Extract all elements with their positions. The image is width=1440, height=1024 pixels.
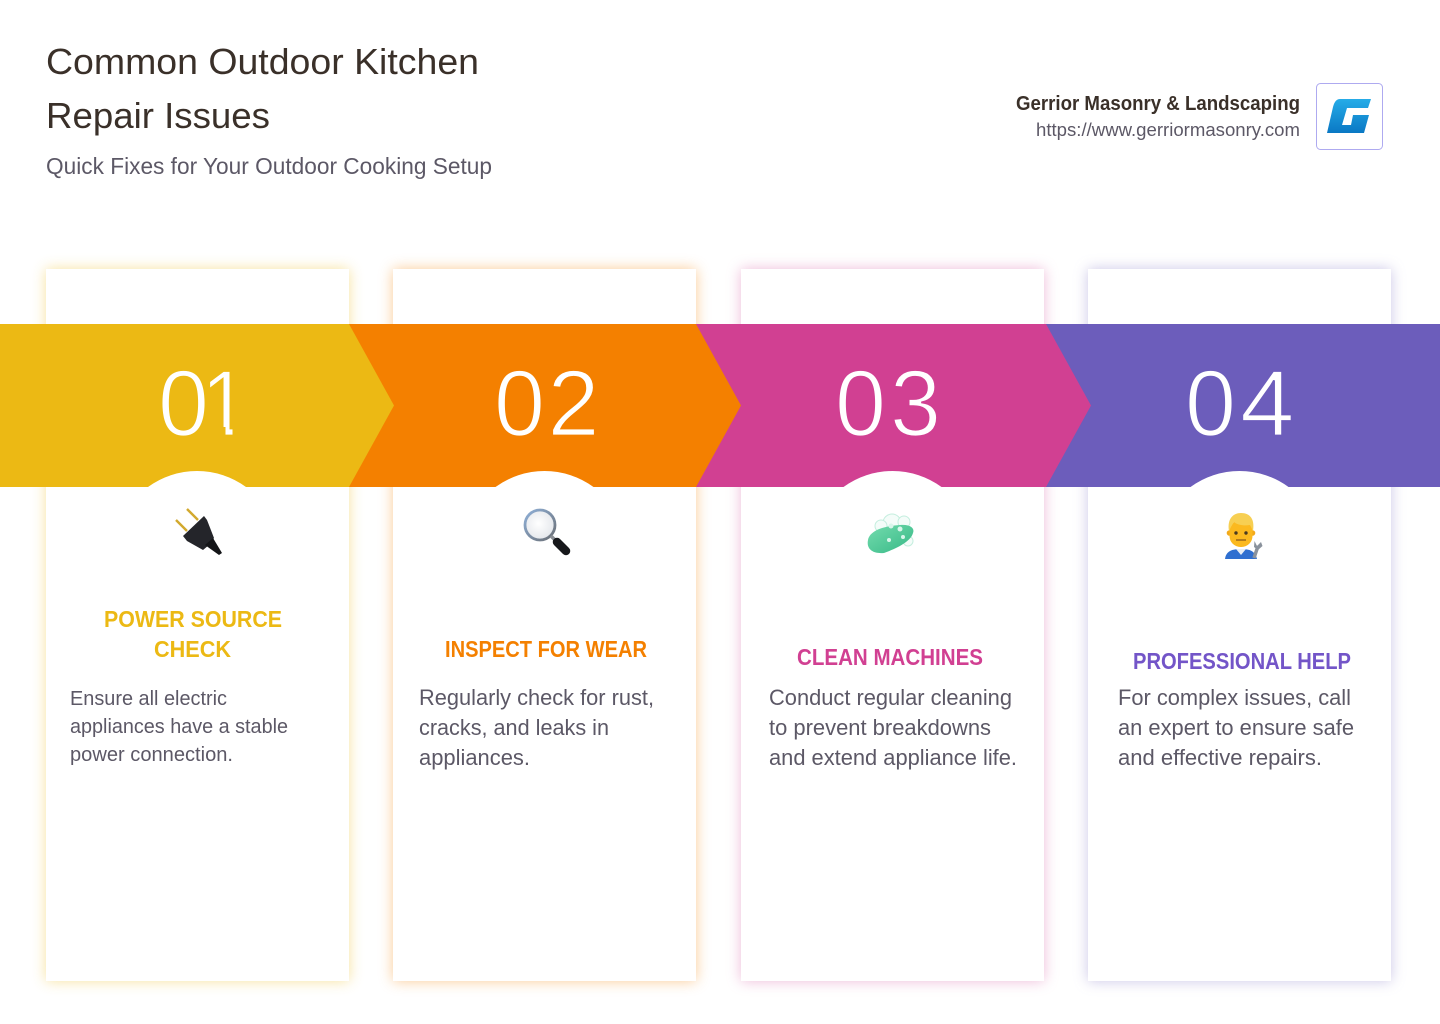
- chevron shape: [1046, 324, 1440, 487]
- icon: company logo: [1316, 84, 1382, 150]
- icon: mechanic: [1225, 513, 1262, 559]
- circle notch: [844, 471, 942, 487]
- heading: [104, 606, 282, 662]
- icon: soap bar: [868, 514, 913, 553]
- number 02: 2: [548, 350, 600, 456]
- body text: appliances.: [419, 745, 530, 770]
- card background: [46, 269, 349, 981]
- number 01: [158, 350, 249, 456]
- subtitle: Quick Fixes for Your Outdoor Cooking Setup: [46, 153, 492, 179]
- body text: power connection.: [70, 744, 233, 766]
- brand block: [1016, 84, 1382, 150]
- card background: [1088, 269, 1391, 981]
- heading: CLEAN MACHINES: [797, 644, 983, 670]
- body text: and extend appliance life.: [769, 745, 1017, 770]
- title: Common Outdoor Kitchen: [46, 41, 479, 82]
- body text: to prevent breakdowns: [769, 715, 991, 740]
- body text: an expert to ensure safe: [1118, 715, 1354, 740]
- body text: For complex issues, call: [1118, 685, 1351, 710]
- number 04: 0: [1185, 350, 1236, 456]
- body text: appliances have a stable: [70, 716, 288, 738]
- chevron shape: [0, 324, 394, 487]
- heading: POWER SOURCE: [104, 606, 282, 632]
- chevron band 01: [0, 324, 394, 487]
- body text: [70, 688, 288, 766]
- heading: CHECK: [154, 636, 231, 662]
- body text: [769, 685, 1017, 770]
- number 04: 4: [1240, 350, 1294, 456]
- number 02: [494, 350, 600, 456]
- card background: [393, 269, 696, 981]
- number 04: [1185, 350, 1294, 456]
- number 01: 0: [158, 350, 209, 456]
- panel: clean machines: [741, 269, 1044, 981]
- heading: INSPECT FOR WEAR: [445, 636, 647, 662]
- title: Repair Issues: [46, 95, 270, 136]
- circle notch: [496, 471, 594, 487]
- panel: professional help: [1088, 269, 1391, 981]
- heading: PROFESSIONAL HELP: [1133, 648, 1351, 674]
- number 01: 1: [201, 350, 249, 456]
- chevron band 02: [349, 324, 741, 487]
- body text: [419, 685, 654, 770]
- icon: electric plug: [176, 509, 222, 555]
- chevron band 04: [1046, 324, 1440, 487]
- brand name: Gerrior Masonry & Landscaping: [1016, 93, 1300, 115]
- title: [46, 41, 479, 136]
- circle notch: [1190, 471, 1288, 487]
- body text: cracks, and leaks in: [419, 715, 609, 740]
- panel: inspect for wear: [393, 269, 696, 981]
- number 03: 0: [835, 350, 886, 456]
- chevron shape: [696, 324, 1091, 487]
- brand url: https://www.gerriormasonry.com: [1036, 120, 1300, 140]
- circle notch: [148, 471, 246, 487]
- panel: power source check: [46, 269, 349, 981]
- icon: magnifying glass: [525, 510, 566, 551]
- body text: [1118, 685, 1354, 770]
- header: title block: [46, 41, 492, 179]
- chevron band 03: [696, 324, 1091, 487]
- body text: and effective repairs.: [1118, 745, 1322, 770]
- chevron shape: [349, 324, 741, 487]
- body text: Regularly check for rust,: [419, 685, 654, 710]
- number 03: 3: [890, 350, 941, 456]
- body text: Conduct regular cleaning: [769, 685, 1012, 710]
- body text: Ensure all electric: [70, 688, 227, 710]
- number 03: [835, 350, 941, 456]
- card background: [741, 269, 1044, 981]
- number 02: 0: [494, 350, 545, 456]
